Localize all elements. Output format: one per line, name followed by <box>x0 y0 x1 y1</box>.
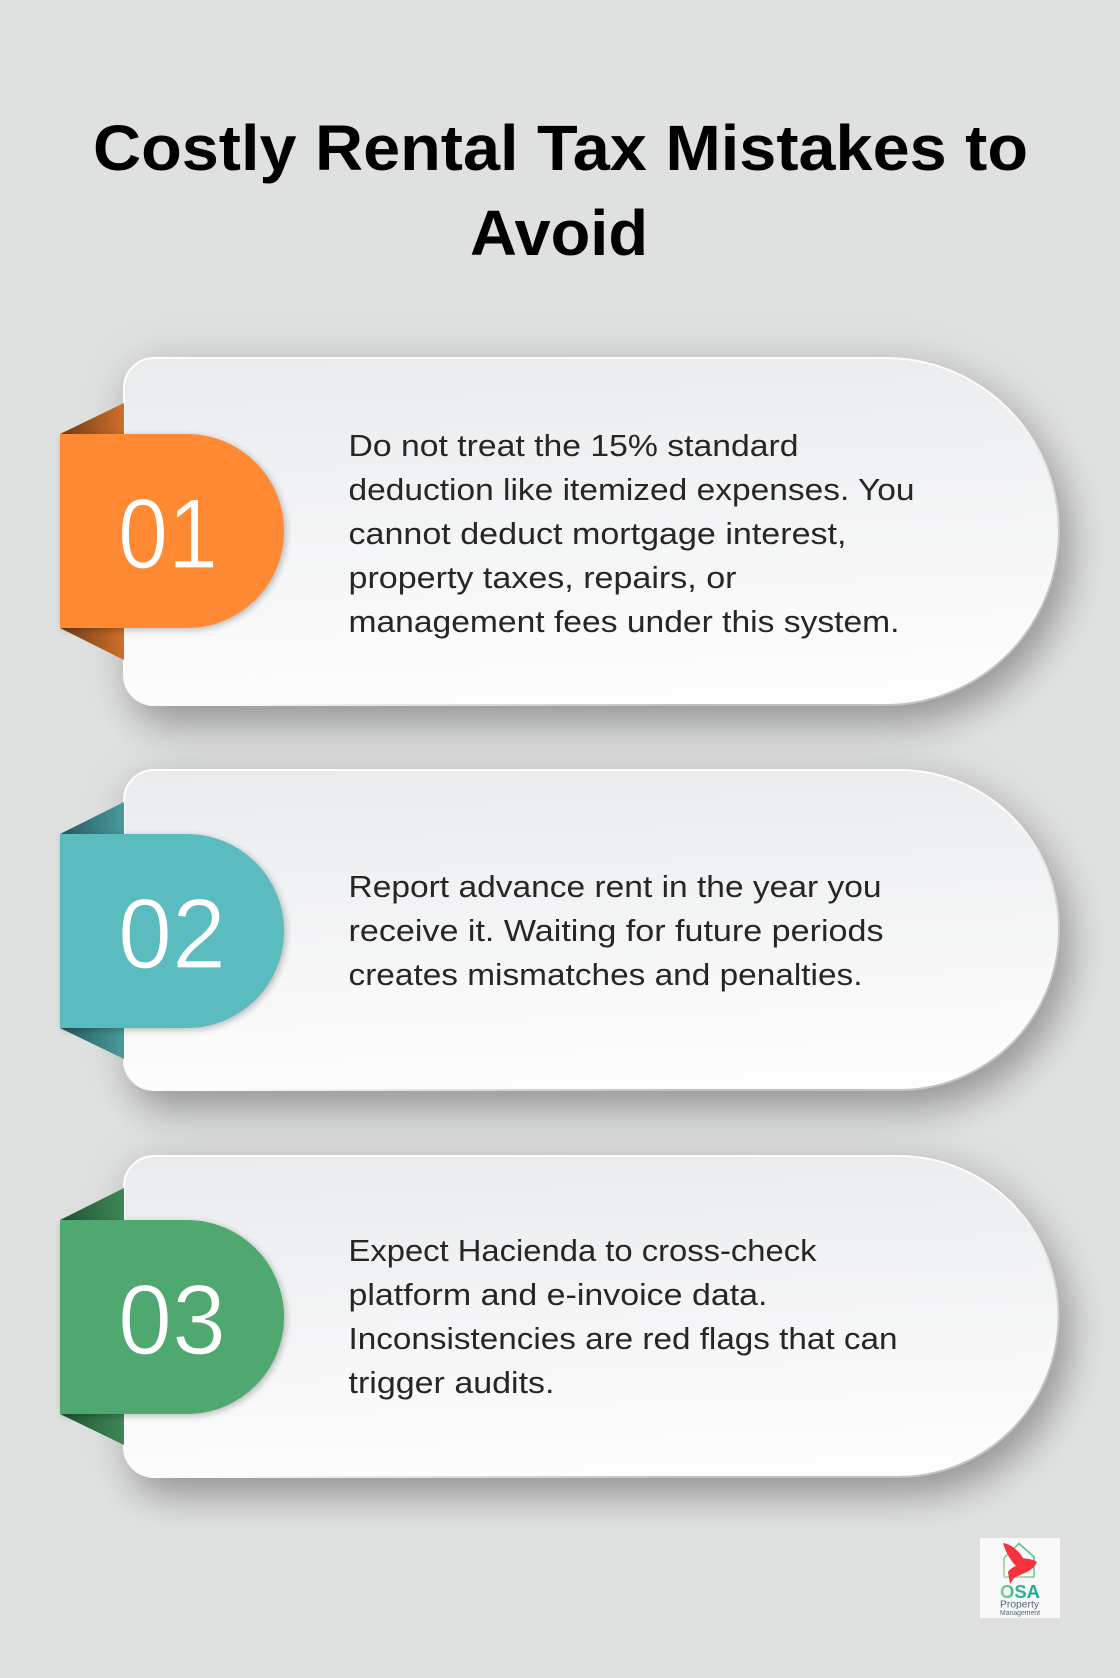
badge shadow 01 <box>62 436 286 630</box>
number 02: 02 <box>118 878 226 989</box>
text 03 <box>348 1233 898 1400</box>
text 01: management fees under this system. <box>348 604 900 639</box>
text 03: trigger audits. <box>348 1365 554 1400</box>
logo: OSA Property Management <box>980 1538 1060 1618</box>
title: Avoid <box>470 197 648 269</box>
card shadow 03 <box>134 1174 1068 1495</box>
badge shadow 02 <box>62 836 286 1030</box>
card 01 <box>124 358 1059 705</box>
number 03: 03 <box>118 1264 226 1375</box>
panel: mistake 02 <box>60 770 1069 1108</box>
badge 02 <box>60 834 284 1028</box>
badge shadow 03 <box>62 1222 286 1416</box>
icon: house outline <box>1004 1544 1034 1577</box>
text 02 <box>348 869 884 992</box>
logo wordmark: OSA <box>1000 1582 1040 1602</box>
text 02: receive it. Waiting for future periods <box>348 913 884 948</box>
ribbon folds 01 <box>60 403 124 660</box>
text 03: Inconsistencies are red flags that can <box>348 1321 898 1356</box>
badge 03 <box>60 1220 284 1414</box>
ribbon folds 02 <box>60 802 124 1059</box>
panel: mistake 03 <box>60 1156 1068 1495</box>
text 02: creates mismatches and penalties. <box>348 957 862 992</box>
card 02 <box>124 770 1059 1090</box>
logo subtitle: Property <box>1000 1600 1039 1610</box>
logo subtitle 2: Management <box>1000 1610 1040 1617</box>
text 01: deduction like itemized expenses. You <box>348 472 914 507</box>
card shadow 02 <box>134 788 1069 1108</box>
panel: mistake 01 <box>60 358 1069 723</box>
title: Costly Rental Tax Mistakes to <box>93 112 1028 184</box>
card glow 02 <box>124 770 1059 1090</box>
text 02: Report advance rent in the year you <box>348 869 882 904</box>
card glow 03 <box>124 1156 1058 1477</box>
number 01: 01 <box>118 478 218 589</box>
text 01 <box>348 428 914 639</box>
text 01: Do not treat the 15% standard <box>348 428 798 463</box>
text 03: platform and e-invoice data. <box>348 1277 768 1312</box>
text 03: Expect Hacienda to cross-check <box>348 1233 817 1268</box>
icon: red bird <box>1003 1543 1037 1584</box>
ribbon folds 03 <box>60 1188 124 1445</box>
card glow 01 <box>124 358 1059 705</box>
text 01: property taxes, repairs, or <box>348 560 736 595</box>
logo tile <box>980 1538 1060 1618</box>
badge 01 <box>60 434 284 628</box>
card 03 <box>124 1156 1058 1477</box>
card shadow 01 <box>134 376 1069 723</box>
text 01: cannot deduct mortgage interest, <box>348 516 846 551</box>
title <box>93 112 1028 269</box>
